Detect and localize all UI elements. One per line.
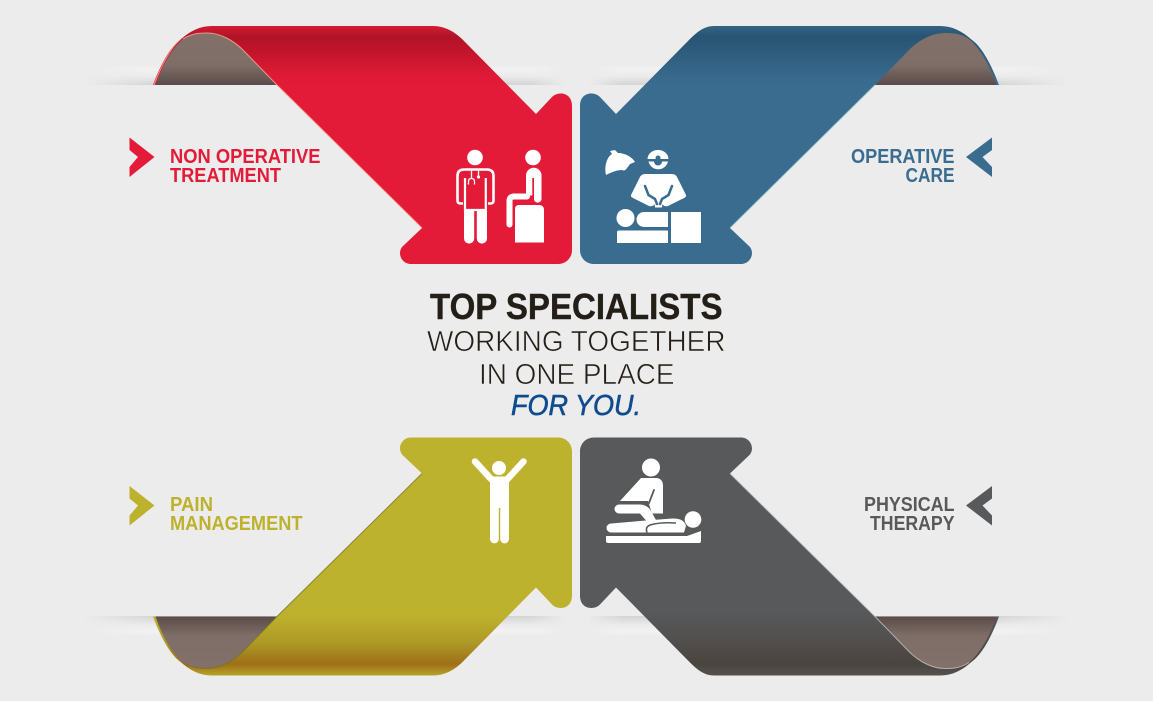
label: pain management <box>130 486 302 535</box>
panel: physical therapy arrow <box>580 438 999 676</box>
blue chevron <box>966 138 992 177</box>
icon: surgeon operating <box>605 150 701 243</box>
blue ribbon underside <box>875 33 996 85</box>
grey label text <box>864 494 955 535</box>
blue ribbon edge highlight <box>730 85 875 228</box>
yellow ribbon edge highlight <box>183 474 422 668</box>
panel: non operative treatment arrow <box>153 26 572 264</box>
label: operative care <box>851 138 992 187</box>
grey ribbon arrow <box>580 438 999 676</box>
red chevron <box>130 138 154 177</box>
panel: pain management arrow <box>153 438 572 676</box>
headline line 3: IN ONE PLACE <box>479 359 674 391</box>
yellow ribbon arrow <box>153 438 572 676</box>
red ribbon edge highlight <box>154 33 422 228</box>
icon: doctor and patient <box>458 150 544 244</box>
infographic canvas <box>108 26 1046 676</box>
yellow chevron <box>130 486 154 526</box>
red ribbon underside <box>156 33 277 85</box>
yellow label text: MANAGEMENT <box>170 513 302 535</box>
icon: therapist massaging patient <box>606 458 701 543</box>
grey label text: PHYSICAL <box>864 494 954 516</box>
icon: person with raised arms <box>475 461 524 543</box>
paper slit shadows <box>85 65 1068 636</box>
label: physical therapy <box>864 486 992 535</box>
panel: operative care arrow <box>580 26 999 264</box>
red label text: NON OPERATIVE <box>170 146 320 168</box>
label: non operative treatment <box>130 138 320 187</box>
red ribbon arrow <box>153 26 572 264</box>
yellow ribbon underside <box>156 616 277 668</box>
headline line 1: TOP SPECIALISTS <box>430 286 722 327</box>
red label text: TREATMENT <box>170 165 281 187</box>
blue label text: CARE <box>906 165 954 187</box>
headline line 2: WORKING TOGETHER <box>427 326 726 358</box>
blue label text: OPERATIVE <box>851 146 954 168</box>
grey ribbon edge highlight <box>730 474 969 668</box>
blue ribbon arrow <box>580 26 999 264</box>
grey label text: THERAPY <box>870 513 955 535</box>
grey chevron <box>966 486 992 526</box>
headline line 4: FOR YOU. <box>511 390 641 422</box>
central headline <box>427 286 726 422</box>
yellow label text: PAIN <box>170 494 213 516</box>
grey ribbon underside <box>875 616 996 668</box>
red label text <box>170 146 320 187</box>
yellow label text <box>170 494 302 535</box>
blue label text <box>851 146 954 187</box>
